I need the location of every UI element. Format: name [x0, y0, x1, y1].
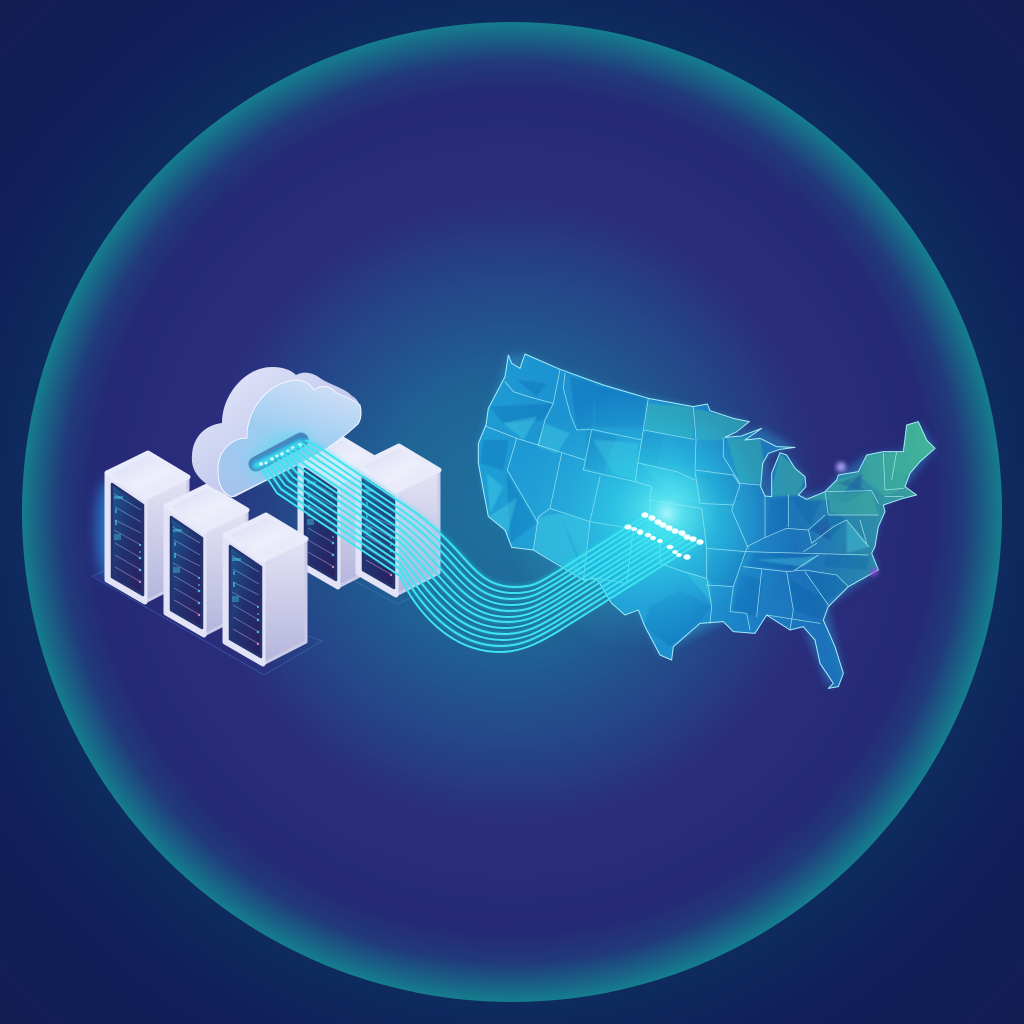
server: middle: [166, 486, 247, 635]
endpoint light nodes: [624, 512, 704, 560]
cloud slot glow: [242, 422, 318, 486]
map of the United States: [476, 352, 936, 689]
magenta coast spot: [870, 568, 878, 576]
map hot spot: [579, 413, 777, 616]
fiber lines from cloud to map: [262, 440, 700, 652]
cloud: [192, 367, 361, 497]
fiber lines glow: [266, 440, 695, 646]
hot spot halo: [505, 390, 765, 650]
server: back right: [358, 446, 439, 595]
server glow: [96, 480, 120, 580]
map outline: [478, 354, 935, 688]
map fill and facets: [478, 355, 934, 688]
server: front: [225, 515, 306, 664]
server: left: [107, 453, 188, 602]
state borders: [485, 369, 903, 630]
map coast glow: [478, 354, 935, 688]
server: back: [300, 438, 381, 587]
lilac light spot: [836, 462, 846, 472]
server floor plates: [92, 555, 428, 675]
cloud data port: [256, 440, 302, 466]
